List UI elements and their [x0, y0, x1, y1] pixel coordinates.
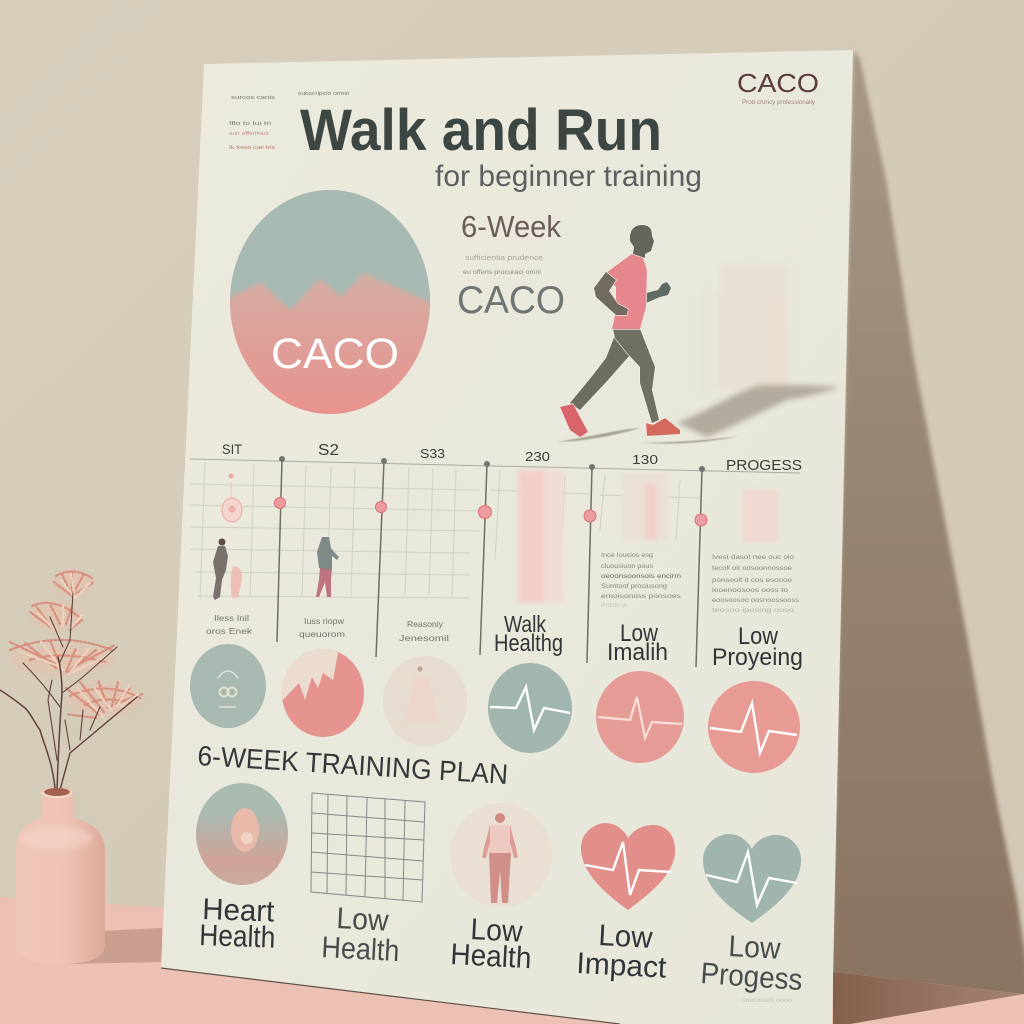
- icon: grid chart: [311, 793, 425, 902]
- column 5 and 6 paragraph lines: ponsoolt it cos esoooe: [712, 577, 792, 584]
- column 5 and 6 paragraph lines: [601, 552, 800, 614]
- faint door panel: [700, 265, 788, 390]
- small header notes: [229, 91, 349, 151]
- mountain logo disc: [225, 185, 435, 414]
- label: heart health: Health: [199, 919, 276, 955]
- top-right brand: CACO: [737, 68, 819, 98]
- head: [630, 225, 654, 258]
- label: low health 1: Low: [336, 902, 390, 938]
- title: Walk and Run: [300, 98, 662, 163]
- timeline column labels: [222, 441, 802, 474]
- poster sheet: [161, 50, 853, 1024]
- progress grid background: [190, 459, 800, 600]
- back arm: [594, 272, 628, 315]
- poster shadow on table: [833, 972, 1024, 1024]
- runner figure: [560, 225, 680, 437]
- label: low health 2: [450, 913, 532, 975]
- walking figures column 1: [213, 538, 242, 600]
- icon row 2: [196, 783, 801, 923]
- torso: [603, 253, 647, 329]
- bottom labels: [199, 893, 804, 997]
- 6-week block: CACO: [457, 279, 565, 322]
- bottom faint note: suociosos oooo: [742, 998, 793, 1004]
- 6-week block: sufficientia prudence: [465, 255, 543, 262]
- vase shoulder highlight: [20, 826, 92, 850]
- column 5 and 6 paragraph lines: oeoonsoonsois encirm: [601, 573, 681, 580]
- 6-week block: [457, 209, 565, 322]
- small header notes: sun offerimus: [229, 131, 269, 137]
- label: low impact: Low: [598, 919, 654, 955]
- pink table surface: [0, 897, 1024, 1024]
- walking figure column 2: [316, 537, 339, 597]
- icon: teal pulse disc: [488, 663, 572, 753]
- poster bottom edge line: [161, 968, 620, 1024]
- column captions: Reasoniy: [407, 619, 444, 629]
- label: heart health: Heart: [202, 893, 276, 929]
- column captions: oros Enek: [206, 626, 253, 636]
- small header notes: Ik tress cae tris: [229, 145, 275, 151]
- timeline column labels: 130: [632, 452, 658, 467]
- icon: split pink disc: [278, 645, 364, 737]
- teal sky above peaks: [225, 185, 435, 310]
- front shoe: [646, 418, 680, 436]
- label: low health 2: Health: [450, 938, 532, 975]
- poster cast shadow on wall: [830, 50, 1024, 1010]
- column bottom headings: Low: [738, 623, 779, 650]
- vase neck and body: [16, 788, 105, 964]
- label: low health 2: Low: [470, 913, 524, 949]
- flower stems: [0, 593, 137, 790]
- timeline markers: [274, 456, 707, 667]
- label: low health 1: [321, 902, 400, 968]
- icon: teal heart pulse: [703, 834, 801, 923]
- back shoe: [560, 404, 588, 437]
- small header notes: subscripcio omnii: [298, 91, 349, 97]
- column 5 and 6 paragraph lines: Ivest dasot nee ouc oio: [712, 554, 794, 561]
- column captions: [206, 613, 449, 643]
- vase opening: [42, 788, 72, 798]
- column 5 and 6 paragraph lines: cluousiuon pous: [601, 563, 654, 570]
- column 5 and 6 paragraph lines: Prdoiu ut: [601, 602, 627, 609]
- label: heart health: [199, 893, 276, 955]
- column 5 and 6 paragraph lines: tecoll oit oosoonnossoe: [712, 565, 792, 572]
- poster: [161, 50, 853, 1024]
- column bottom headings: Low: [620, 620, 659, 647]
- column 5 and 6 paragraph lines: eoosoosoo oosnoossooss: [712, 597, 800, 604]
- top-right brand: Prod cruncy professionally: [742, 100, 815, 106]
- soft flower masses: [10, 571, 140, 717]
- column captions: Jenesomil: [399, 633, 449, 643]
- icon row 1: [190, 644, 800, 773]
- label: low health 1: Health: [321, 931, 400, 968]
- timeline column labels: SIT: [222, 441, 242, 457]
- column 5 and 6 paragraph lines: teosoo iposing ooso: [712, 607, 795, 614]
- column 5 and 6 paragraph lines: emoisoniiss ponsoes: [601, 593, 682, 600]
- flower clusters: [10, 570, 142, 718]
- column 5 and 6 paragraph lines: Ince Ioucios esg: [601, 552, 653, 559]
- icon: pink pulse disc large: [708, 681, 800, 773]
- section heading: 6-WEEK TRAINING PLAN: [197, 740, 509, 790]
- label: low progress: Low: [728, 930, 782, 966]
- column captions: queuorom: [299, 629, 345, 639]
- runner ground shadow: [677, 385, 840, 437]
- column bottom headings: Proyeing: [712, 644, 803, 671]
- heart marker in column 1: [222, 474, 242, 522]
- column bottom headings: [494, 611, 803, 671]
- timeline column labels: S2: [318, 442, 339, 459]
- subtitle: for beginner training: [435, 160, 702, 193]
- column bottom headings: Walk: [504, 611, 546, 637]
- icon: pink heart pulse: [581, 823, 675, 910]
- 6-week block: 6-Week: [461, 209, 561, 244]
- label: low impact: [576, 919, 668, 985]
- front arm: [646, 282, 671, 303]
- icon: pink pulse disc: [596, 671, 684, 763]
- 6-week block: eu offeris procuraci omni: [463, 270, 541, 276]
- timeline column labels: 230: [525, 449, 550, 464]
- column captions: Iuss riopw: [304, 616, 345, 626]
- disc label: CACO: [271, 330, 399, 378]
- icon: standing figure disc: [450, 803, 552, 907]
- label: low progress: Progess: [700, 957, 804, 997]
- icon: beige figure disc: [383, 656, 467, 746]
- column 5 and 6 paragraph lines: leoenoosoos ooss to: [712, 587, 788, 594]
- small header notes: Iflo to tui tri: [229, 121, 271, 127]
- column 5 and 6 paragraph lines: Sumtoof prociusong: [601, 583, 667, 590]
- label: low impact: Impact: [576, 947, 668, 985]
- column captions: Iless Inil: [214, 613, 249, 623]
- vase with dried flowers: [0, 570, 142, 964]
- timeline column labels: S33: [420, 446, 445, 461]
- vase shadow on table: [67, 928, 162, 964]
- small header notes: surcos canis: [231, 95, 275, 101]
- back leg: [570, 335, 630, 410]
- icon: figure disc: [196, 783, 288, 885]
- label: low progress: [700, 930, 804, 997]
- column bottom headings: Healthg: [494, 630, 563, 657]
- icon: infinity disc: [190, 644, 266, 728]
- column bottom headings: Imalih: [607, 639, 668, 666]
- timeline column labels: PROGESS: [726, 457, 802, 474]
- front leg: [613, 329, 659, 423]
- pink column bars: [518, 470, 779, 603]
